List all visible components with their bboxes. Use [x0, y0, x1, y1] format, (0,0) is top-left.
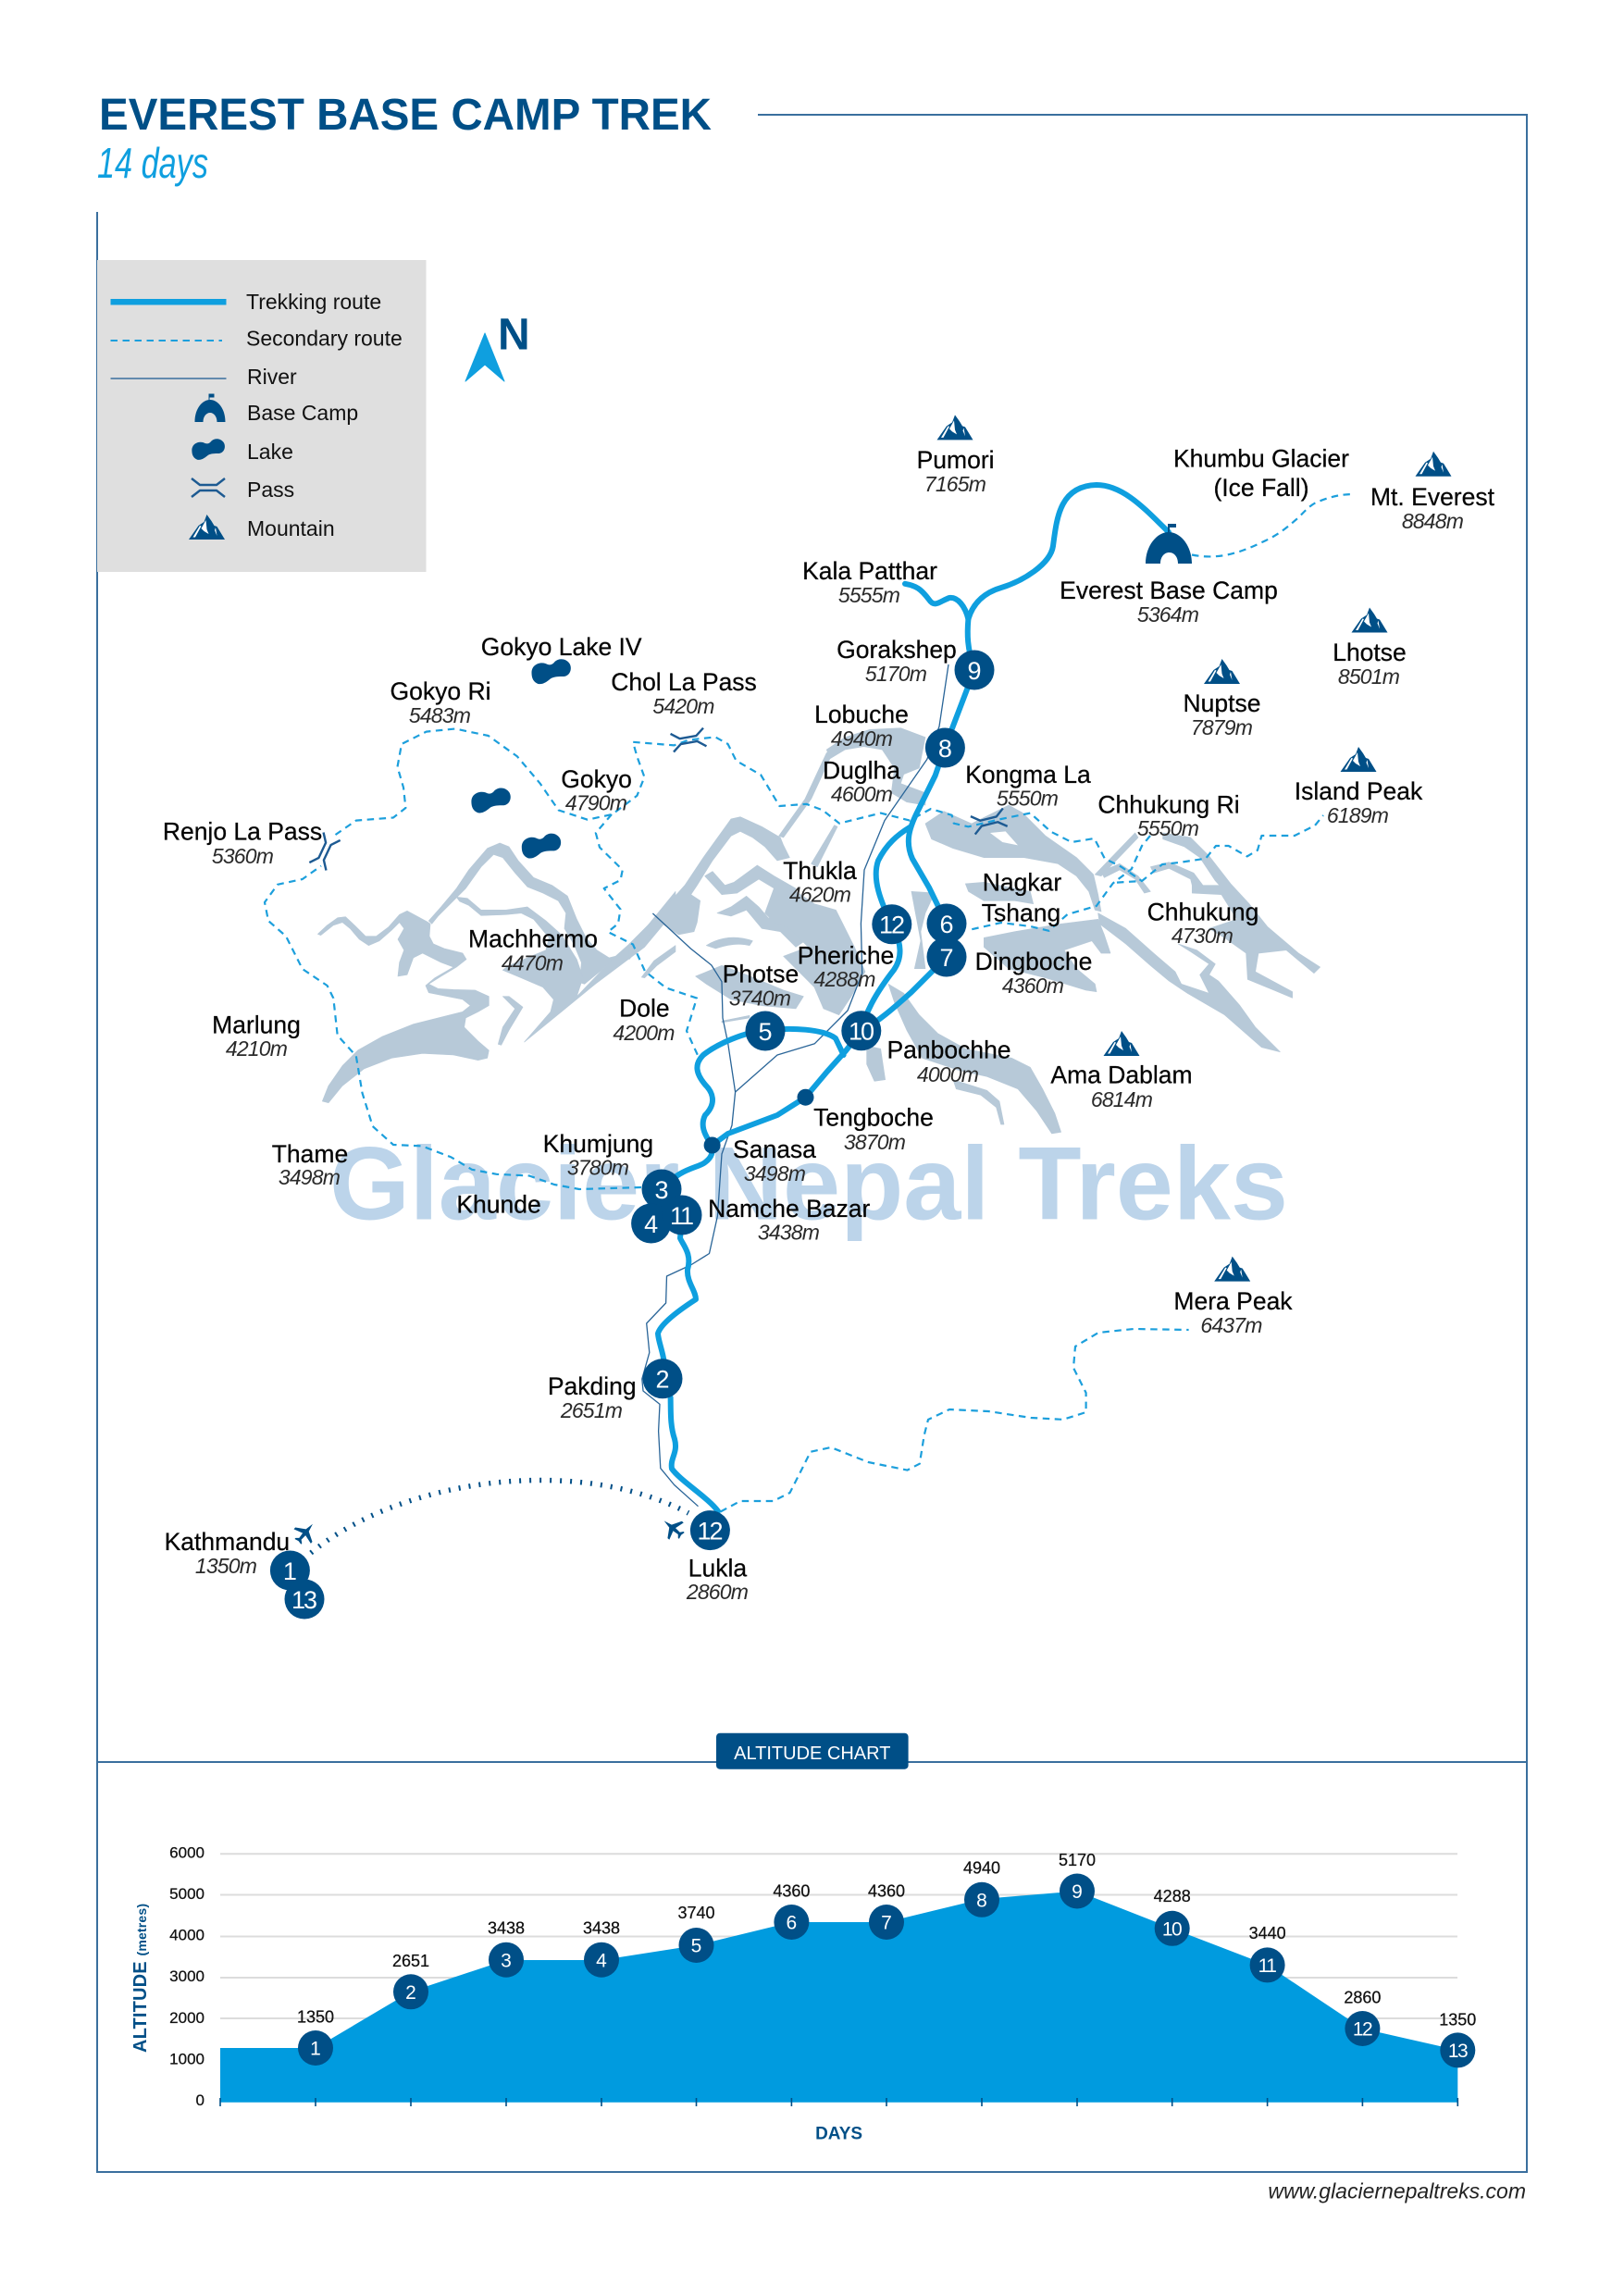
label: Nuptse: Nuptse — [1184, 689, 1260, 717]
chart markers: 2651 — [392, 1952, 429, 1970]
label: Panbochhe — [886, 1036, 1011, 1086]
label: Kathmandu: 1350m — [195, 1554, 257, 1578]
label: Gorakshep — [837, 636, 957, 686]
chart markers: 9 — [1072, 1881, 1083, 1903]
label: Gokyo — [561, 765, 632, 814]
label: Pheriche — [798, 942, 894, 991]
label: Ama Dablam — [1050, 1061, 1193, 1111]
label: Thame: Thame — [272, 1140, 348, 1168]
label: Kathmandu — [165, 1528, 290, 1578]
chart markers — [297, 1851, 1476, 2067]
marker 7 — [927, 937, 966, 977]
chart markers: 1350 — [1439, 2010, 1476, 2029]
subtitle: duration: 14 days — [97, 139, 208, 187]
label: Lukla: 2860m — [686, 1580, 749, 1604]
label: Khunde: Khunde — [456, 1191, 541, 1219]
chart markers: 3438 — [583, 1919, 620, 1938]
label: Mera Peak: Mera Peak — [1173, 1287, 1293, 1315]
label: Gokyo Ri: Gokyo Ri — [391, 677, 490, 705]
label: Island Peak: Island Peak — [1295, 777, 1423, 805]
chart markers: 10 — [1162, 1919, 1182, 1940]
marker 11 — [663, 1196, 701, 1235]
label: Thukla — [783, 857, 857, 907]
marker 1: 1 — [283, 1558, 297, 1585]
x axis title: DAYS — [815, 2125, 862, 2144]
label: Namche Bazar: Namche Bazar — [708, 1195, 871, 1222]
marker 5 — [746, 1011, 785, 1051]
altitude area — [220, 1892, 1457, 2103]
label: Nuptse — [1184, 689, 1260, 739]
chart markers: 13 — [1448, 2041, 1468, 2062]
label: Pakding: Pakding — [548, 1372, 637, 1400]
marker 2 — [642, 1359, 683, 1398]
legend: pass: Pass — [247, 478, 294, 502]
label: Tengboche: Tengboche — [813, 1104, 934, 1132]
label: Pheriche: 4288m — [813, 967, 875, 991]
chart markers: 4288 — [1154, 1887, 1191, 1905]
label: Pumori: Pumori — [917, 446, 995, 474]
label: Sanasa: 3498m — [744, 1161, 806, 1185]
label: Gokyo Ri: 5483m — [409, 703, 471, 727]
marker 4 — [631, 1203, 671, 1244]
y axis labels: 5000 — [169, 1885, 205, 1903]
label: Ama Dablam: Ama Dablam — [1050, 1061, 1193, 1089]
map and chart frame — [97, 115, 1527, 2172]
marker 10 — [841, 1011, 881, 1050]
label: Renjo La Pass: Renjo La Pass — [163, 818, 322, 846]
label: Duglha: Duglha — [823, 757, 900, 785]
marker 9: 9 — [967, 657, 982, 685]
label: Duglha: 4600m — [831, 782, 893, 806]
marker 4: 4 — [644, 1210, 658, 1238]
label: Thame — [272, 1140, 348, 1189]
legend: lake — [192, 439, 293, 464]
label: Chhukung Ri: 5550m — [1137, 816, 1199, 840]
label: Lhotse — [1333, 639, 1407, 689]
label: Chhukung — [1147, 899, 1258, 948]
chart markers: 5 — [691, 1936, 701, 1956]
chart markers: 3440 — [1249, 1924, 1286, 1942]
legend: river: River — [247, 365, 297, 389]
label: Mt. Everest — [1370, 483, 1495, 533]
day markers on map — [270, 650, 994, 1620]
legend: trekking route — [111, 290, 381, 314]
label: Kala Patthar: Kala Patthar — [802, 557, 937, 585]
label: Photse: Photse — [723, 961, 799, 988]
label: Thukla: 4620m — [789, 883, 851, 907]
label: Chhukung Ri: Chhukung Ri — [1097, 791, 1240, 819]
y axis labels: 4000 — [169, 1927, 205, 1943]
mountain icons — [936, 415, 1451, 1282]
label: Kongma La: 5550m — [997, 787, 1059, 811]
label: Gorakshep: 5170m — [865, 662, 927, 686]
marker 1 — [270, 1551, 310, 1590]
label: Everest Base Camp: 5364m — [1137, 602, 1199, 627]
x axis ticks — [220, 2098, 1457, 2106]
waypoint Sanasa — [704, 1136, 721, 1153]
title: EVEREST BASE CAMP TREK — [99, 91, 712, 140]
chart markers: 2860 — [1344, 1988, 1381, 2006]
y axis labels — [169, 1843, 205, 2109]
terrain backdrop — [317, 728, 1320, 1134]
label: Chhukung: 4730m — [1172, 924, 1233, 948]
label: Panbochhe: 4000m — [917, 1062, 979, 1086]
label: Namche Bazar: 3438m — [758, 1221, 820, 1245]
marker 12 at Pheriche: 12 — [879, 911, 904, 938]
altitude chart — [130, 1843, 1476, 2144]
secondary routes — [265, 494, 1355, 1512]
watermark: Glacier Nepal Treks — [329, 1125, 1288, 1242]
chart markers: 5170 — [1059, 1851, 1096, 1869]
label: Photse — [723, 961, 799, 1011]
label: Pakding — [548, 1372, 637, 1422]
label: Nagkar Tshang: Tshang — [982, 900, 1060, 927]
label: Gorakshep: Gorakshep — [837, 636, 957, 664]
label: Gokyo Ri — [391, 677, 490, 727]
y axis title: ALTITUDE (metres) — [130, 1904, 151, 2053]
label: Lobuche — [814, 701, 909, 751]
label: Renjo La Pass — [163, 818, 322, 868]
chart markers: 3740 — [677, 1904, 715, 1922]
label: Machhermo: Machhermo — [468, 925, 598, 953]
label: Gokyo: 4790m — [565, 790, 627, 814]
label: Dole: Dole — [619, 995, 670, 1023]
flight path — [311, 1480, 688, 1553]
label: Dingboche — [975, 948, 1092, 998]
chart markers: 4360 — [868, 1882, 905, 1901]
label: Khumbu Glacier: Khumbu Glacier — [1173, 444, 1349, 472]
legend: base camp — [194, 394, 358, 425]
label: Chhukung Ri — [1097, 791, 1240, 840]
chart markers: 1 — [310, 2038, 321, 2060]
label: Marlung — [212, 1011, 301, 1061]
icon: plane Lukla — [657, 1512, 689, 1545]
waypoint Tengboche — [798, 1089, 814, 1106]
chart markers: 11 — [1258, 1955, 1276, 1977]
marker 7: 7 — [939, 944, 954, 972]
chart markers: 4940 — [963, 1858, 1000, 1877]
marker 8: 8 — [938, 735, 952, 763]
chart markers: 8 — [976, 1890, 987, 1912]
label: Chol La Pass — [611, 668, 757, 718]
chart markers: 2 — [405, 1982, 416, 2004]
trekking route — [658, 485, 1169, 1511]
label: Pakding: 2651m — [560, 1398, 623, 1422]
legend: mountain: Mountain — [247, 516, 335, 540]
label: Nagkar Tshang — [982, 868, 1061, 927]
legend: base camp: Base Camp — [247, 401, 358, 425]
legend: pass — [192, 478, 294, 502]
label: Gokyo: Gokyo — [561, 765, 632, 793]
chart markers: 12 — [1353, 2019, 1372, 2040]
marker 5: 5 — [758, 1018, 773, 1046]
label: Mt. Everest: Mt. Everest — [1370, 483, 1495, 511]
marker 10: 10 — [849, 1018, 874, 1046]
lake icons — [471, 659, 571, 859]
label: Dingboche: 4360m — [1002, 974, 1064, 998]
label: Lobuche: 4940m — [831, 726, 893, 751]
label: Dole: 4200m — [613, 1021, 675, 1045]
marker 12 at Lukla: 12 — [697, 1518, 722, 1545]
label: Mera Peak: 6437m — [1200, 1313, 1262, 1337]
label: Mera Peak — [1173, 1287, 1293, 1337]
label: Marlung: Marlung — [212, 1011, 301, 1038]
marker 11: 11 — [670, 1202, 693, 1230]
chart markers: 3438 — [488, 1919, 525, 1938]
north arrow: N — [498, 311, 530, 359]
chart markers: 4360 — [773, 1882, 810, 1901]
label: Tengboche: 3870m — [844, 1130, 906, 1154]
label: Khumjung — [543, 1130, 653, 1180]
label: Dingboche: Dingboche — [975, 948, 1092, 975]
y axis labels: 2000 — [169, 2009, 205, 2027]
label: Lhotse: 8501m — [1338, 664, 1400, 689]
marker 3 — [642, 1170, 681, 1209]
label: Nuptse: 7879m — [1191, 715, 1253, 739]
marker 3: 3 — [654, 1176, 669, 1204]
label: Island Peak: 6189m — [1327, 803, 1389, 827]
chart markers: 6 — [787, 1912, 797, 1934]
label: Thukla: Thukla — [783, 857, 857, 885]
label: Thame: 3498m — [279, 1165, 341, 1189]
label: Duglha — [823, 757, 900, 806]
legend panel — [97, 260, 426, 572]
chart markers: 4 — [596, 1951, 607, 1971]
website: www.glaciernepaltreks.com — [1268, 2178, 1526, 2203]
label: Lobuche: Lobuche — [814, 701, 909, 728]
label: Nagkar Tshang: Nagkar — [983, 868, 1061, 896]
marker 13 — [285, 1579, 324, 1620]
y axis labels: 6000 — [169, 1843, 205, 1862]
chart markers: 1350 — [297, 2008, 334, 2027]
marker 6 — [927, 903, 966, 944]
label: Pheriche: Pheriche — [798, 942, 894, 970]
label: Pumori: 7165m — [924, 472, 986, 496]
label: Sanasa: Sanasa — [733, 1136, 816, 1163]
label: Lukla: Lukla — [688, 1555, 747, 1582]
grid lines — [220, 1854, 1457, 2060]
label: Machhermo: 4470m — [502, 951, 564, 975]
label: Sanasa — [733, 1136, 816, 1185]
legend: secondary route: Secondary route — [246, 326, 403, 350]
label: Mt. Everest: 8848m — [1402, 509, 1464, 533]
label: Ama Dablam: 6814m — [1091, 1087, 1153, 1111]
rivers — [642, 664, 948, 1507]
label: Dole — [613, 995, 675, 1045]
pass icons — [309, 728, 1008, 871]
icon: base camp — [1146, 524, 1192, 564]
chart markers: 7 — [881, 1912, 892, 1934]
altitude chart badge: ALTITUDE CHART — [734, 1744, 890, 1764]
label: Everest Base Camp — [1060, 577, 1278, 627]
north arrow — [465, 311, 530, 381]
label: Khumjung: 3780m — [567, 1156, 629, 1180]
label: Island Peak — [1295, 777, 1423, 827]
label: Khumjung: Khumjung — [543, 1130, 653, 1158]
label: Namche Bazar — [708, 1195, 871, 1245]
label: Everest Base Camp: Everest Base Camp — [1060, 577, 1278, 604]
label: Khumbu Glacier — [1173, 444, 1349, 502]
place labels — [163, 444, 1495, 1604]
label: Tengboche — [813, 1104, 934, 1154]
label: Machhermo — [468, 925, 598, 975]
label: Kala Patthar — [802, 557, 937, 607]
label: Kongma La — [965, 761, 1091, 811]
label: Chhukung: Chhukung — [1147, 899, 1258, 926]
marker 2: 2 — [655, 1366, 670, 1394]
label: Lhotse: Lhotse — [1333, 639, 1407, 666]
marker 12 at Pheriche — [872, 904, 911, 944]
label: Photse: 3740m — [729, 987, 791, 1011]
label: Khumbu Glacier: (Ice Fall) — [1213, 474, 1309, 502]
label: Chol La Pass: Chol La Pass — [611, 668, 757, 696]
legend: lake: Lake — [247, 440, 293, 464]
y axis labels: 0 — [196, 2091, 205, 2109]
label: Renjo La Pass: 5360m — [212, 844, 274, 868]
label: Kongma La: Kongma La — [965, 761, 1091, 788]
label: Pumori — [917, 446, 995, 496]
y axis labels: 1000 — [169, 2051, 205, 2067]
label: Kathmandu: Kathmandu — [165, 1528, 290, 1556]
icon: plane Kathmandu — [290, 1517, 321, 1549]
label: Panbochhe: Panbochhe — [886, 1036, 1011, 1064]
legend: trekking route: Trekking route — [246, 290, 381, 314]
label: Gokyo Lake IV: Gokyo Lake IV — [481, 633, 642, 661]
label: Lukla — [686, 1555, 749, 1604]
legend: mountain — [189, 515, 335, 540]
label: Chol La Pass: 5420m — [652, 694, 714, 718]
chart markers: 3 — [501, 1951, 512, 1971]
label: Marlung: 4210m — [226, 1036, 288, 1061]
marker 6: 6 — [939, 911, 954, 938]
label: Kala Patthar: 5555m — [838, 583, 900, 607]
marker 9 — [955, 650, 994, 690]
marker 13: 13 — [291, 1586, 316, 1614]
marker 12 at Lukla — [690, 1510, 730, 1550]
altitude chart badge — [716, 1733, 909, 1769]
marker 8 — [925, 727, 965, 768]
y axis labels: 3000 — [169, 1967, 205, 1985]
